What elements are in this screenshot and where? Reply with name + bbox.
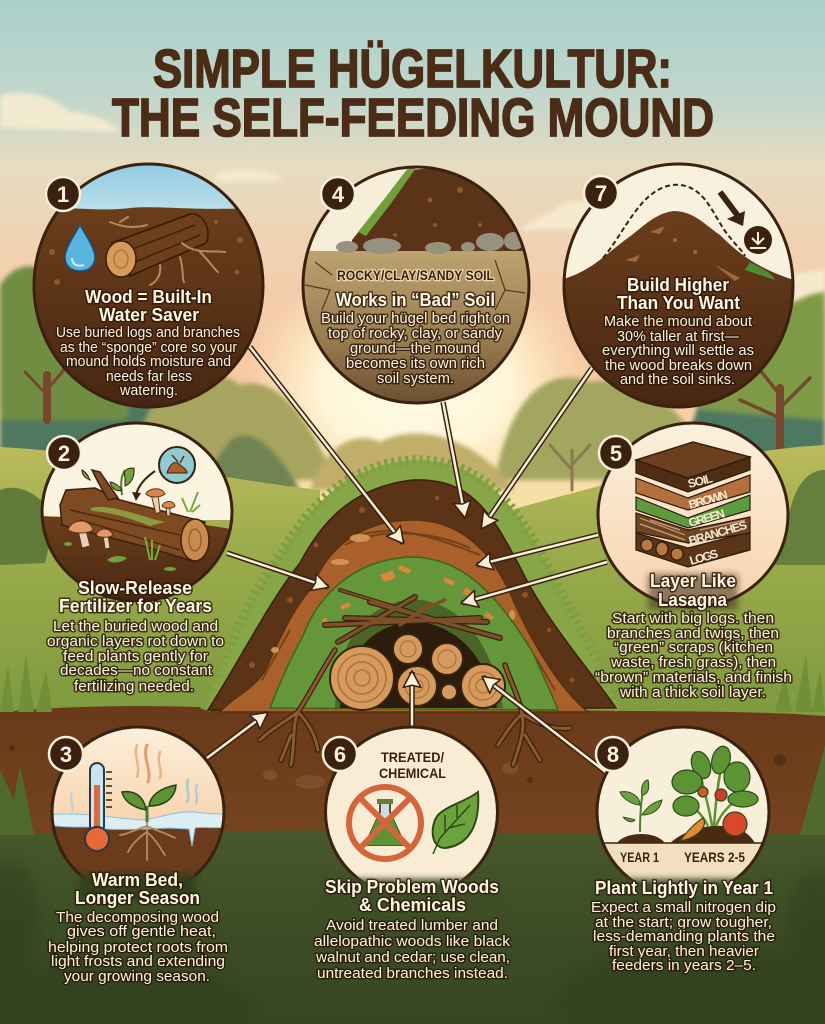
- heading: Build Higher: [627, 275, 729, 295]
- soil label: ROCKY/CLAY/SANDY SOIL: [337, 267, 494, 283]
- body text: [595, 611, 792, 701]
- panel outline: [52, 727, 224, 897]
- heading: [75, 870, 200, 908]
- body text: with a thick soil layer.: [619, 685, 766, 701]
- badge 8: 8: [607, 742, 619, 767]
- mound grass cover: [205, 460, 620, 710]
- body text: and the soil sinks.: [620, 372, 735, 388]
- body text: branches and twigs, then: [607, 626, 779, 642]
- body text: “brown” materials, and finish: [595, 670, 792, 686]
- layer labels: LOGS: [688, 546, 720, 568]
- small sprout: [620, 780, 662, 832]
- illustration: buried log and water drop: [30, 160, 270, 410]
- year labels: YEARS 2-5: [684, 849, 745, 865]
- body text: as the “sponge” core so your: [60, 340, 237, 356]
- body text: first year, then heavier: [609, 944, 759, 960]
- body text: fertilizing needed.: [74, 679, 194, 695]
- body text: allelopathic woods like black: [314, 934, 511, 950]
- year labels: [620, 849, 745, 865]
- illustration: year 1 and years 2-5 plants: [598, 728, 768, 884]
- arrow: tip 5 to brown layer: [477, 535, 598, 565]
- body text: soil system.: [377, 371, 454, 387]
- title: SIMPLE HÜGELKULTUR:: [153, 39, 672, 99]
- body text: untreated branches instead.: [317, 966, 508, 982]
- body text: [591, 900, 776, 974]
- body text: [56, 325, 240, 399]
- panel outline: [42, 423, 232, 601]
- heading: [617, 275, 740, 313]
- badge 8: [596, 737, 630, 771]
- heading: Skip Problem Woods: [325, 877, 499, 897]
- heading: Than You Want: [617, 293, 740, 313]
- body text: at the start; grow tougher,: [595, 915, 772, 931]
- heading: [85, 287, 212, 325]
- layer labels: BROWN: [687, 487, 729, 512]
- body text: needs far less: [106, 369, 192, 385]
- badge 3: [49, 737, 83, 771]
- heading: Works in “Bad” Soil: [336, 290, 495, 310]
- panel: tip 1 wood water saver: [30, 160, 270, 410]
- body text: [47, 619, 224, 695]
- heading: Wood = Built-In: [85, 287, 212, 307]
- body text: [48, 910, 228, 985]
- arrow: tip 3 to mound base: [207, 713, 267, 758]
- body text: Build your hügel bed right on: [321, 311, 510, 327]
- body text: feeders in years 2–5.: [612, 958, 756, 974]
- body text: the wood breaks down: [605, 358, 752, 374]
- illustration: mound on poor soil: [304, 168, 528, 402]
- body text: helping protect roots from: [48, 940, 228, 956]
- body text: “green” scraps (kitchen: [614, 640, 773, 656]
- badge 2: [47, 436, 81, 470]
- roots: [260, 650, 570, 765]
- badge 4: [321, 177, 355, 211]
- arrow: tip 8 to logs: [483, 677, 607, 773]
- settling icon: [744, 226, 772, 254]
- heading: Plant Lightly in Year 1: [595, 878, 773, 898]
- log: big: [330, 646, 394, 710]
- body text: light frosts and extending: [51, 954, 225, 970]
- title: [112, 39, 714, 148]
- curved arrow and icon: nutrients: [132, 447, 195, 501]
- arrow: tip 2 to mound: [227, 553, 328, 587]
- arrow: tip 7 to mound: [482, 368, 592, 528]
- central mound cross-section: [205, 460, 620, 765]
- illustration: layer stack: [636, 442, 750, 567]
- body text: Let the buried wood and: [53, 619, 218, 635]
- arrow: tip 4 to mound: [443, 402, 465, 517]
- panel: tip 8 plant lightly: [591, 725, 776, 974]
- heading: Lasagna: [658, 590, 728, 610]
- badge 6: 6: [334, 742, 346, 767]
- panel outline: [303, 167, 529, 403]
- panel: tip 3 warm bed: [48, 725, 228, 985]
- body text: 30% taller at first—: [617, 329, 739, 345]
- body text: feed plants gently for: [63, 649, 208, 665]
- body text: The decomposing wood: [56, 910, 219, 926]
- settling arrow: [720, 192, 745, 226]
- arrow: tip 6 to logs: [409, 672, 415, 728]
- body text: Make the mound about: [604, 314, 752, 330]
- body text: walnut and cedar; use clean,: [315, 950, 510, 966]
- panel: tip 5 layer like lasagna: [595, 423, 792, 701]
- heading: [59, 578, 212, 616]
- body text: decades—no constant: [60, 663, 212, 679]
- badge 5: [599, 436, 633, 470]
- year labels: YEAR 1: [620, 849, 659, 865]
- heading: Layer Like: [650, 571, 736, 591]
- icon: no chemicals: [349, 787, 421, 859]
- mound soil layer: [208, 480, 616, 710]
- badge 1: [46, 177, 80, 211]
- panel disc: [326, 727, 498, 897]
- panel outline: [564, 164, 793, 407]
- panel: tip 7 build higher: [560, 160, 800, 410]
- body text: waste, fresh grass), then: [610, 655, 776, 671]
- body text: everything will settle as: [602, 343, 754, 359]
- panel: tip 6 skip problem woods: [314, 727, 511, 982]
- layer labels: BRANCHES: [687, 518, 749, 548]
- panel: tip 2 slow-release fertilizer: [40, 420, 235, 695]
- illustration: thermometer, sprout and frost: [54, 728, 222, 877]
- badge 4: 4: [332, 182, 345, 207]
- dashed original height: [603, 185, 745, 258]
- heading: Longer Season: [75, 888, 200, 908]
- body text: your growing season.: [64, 969, 210, 985]
- panel outline: [34, 164, 263, 407]
- large plant with vegetables: [672, 744, 758, 841]
- body text: [321, 311, 510, 387]
- body text: organic layers rot down to: [47, 634, 224, 650]
- badge 7: [584, 176, 618, 210]
- badge 5: 5: [610, 441, 622, 466]
- illustration: settling mound: [560, 160, 800, 410]
- heading: [325, 877, 499, 915]
- heading: Fertilizer for Years: [59, 596, 212, 616]
- heading: Slow-Release: [78, 578, 192, 598]
- arrow: tip 1 to mound: [250, 347, 403, 543]
- illustration: rotting log with mushrooms: [40, 420, 235, 605]
- badge 7: 7: [595, 181, 607, 206]
- body text: [314, 918, 511, 982]
- compost scraps: [322, 565, 494, 626]
- sprout: [122, 785, 176, 822]
- heading: [650, 571, 736, 610]
- panel disc: [598, 423, 788, 607]
- body text: less-demanding plants the: [593, 929, 775, 945]
- panel: tip 4 works in bad soil: [300, 160, 535, 406]
- heading: Water Saver: [99, 305, 199, 325]
- body text: Start with big logs. then: [612, 611, 774, 627]
- body text: [602, 314, 754, 388]
- treated label: CHEMICAL: [379, 765, 446, 781]
- icon: clean leaf: [433, 792, 478, 854]
- green layer: [270, 557, 558, 710]
- body text: watering.: [119, 383, 178, 399]
- body text: top of rocky, clay, or sandy: [328, 326, 503, 342]
- layer labels: GREEN: [687, 506, 726, 530]
- body text: Avoid treated lumber and: [326, 918, 498, 934]
- treated label: [379, 749, 446, 781]
- branches: [325, 590, 500, 642]
- layer labels: SOIL: [686, 471, 714, 491]
- arrow: tip 5 to green layer: [462, 562, 607, 603]
- heading: Warm Bed,: [92, 870, 183, 890]
- thermometer: [85, 763, 112, 851]
- body text: becomes its own rich: [346, 356, 485, 372]
- brown layer: [220, 520, 588, 712]
- body text: Expect a small nitrogen dip: [591, 900, 776, 916]
- body text: mound holds moisture and: [66, 354, 231, 370]
- dark core behind logs: [335, 600, 503, 708]
- body text: gives off gentle heat,: [67, 924, 216, 940]
- layer labels: [686, 471, 749, 568]
- body text: Use buried logs and branches: [56, 325, 240, 341]
- badge 6: [323, 737, 357, 771]
- body text: ground—the mound: [350, 341, 480, 357]
- badge 2: 2: [58, 441, 70, 466]
- treated label: TREATED/: [381, 749, 444, 765]
- badge 1: 1: [57, 182, 69, 207]
- badge 3: 3: [60, 742, 72, 767]
- heading: & Chemicals: [359, 895, 466, 915]
- log: small ones: [393, 634, 505, 708]
- panel outline: [597, 727, 769, 897]
